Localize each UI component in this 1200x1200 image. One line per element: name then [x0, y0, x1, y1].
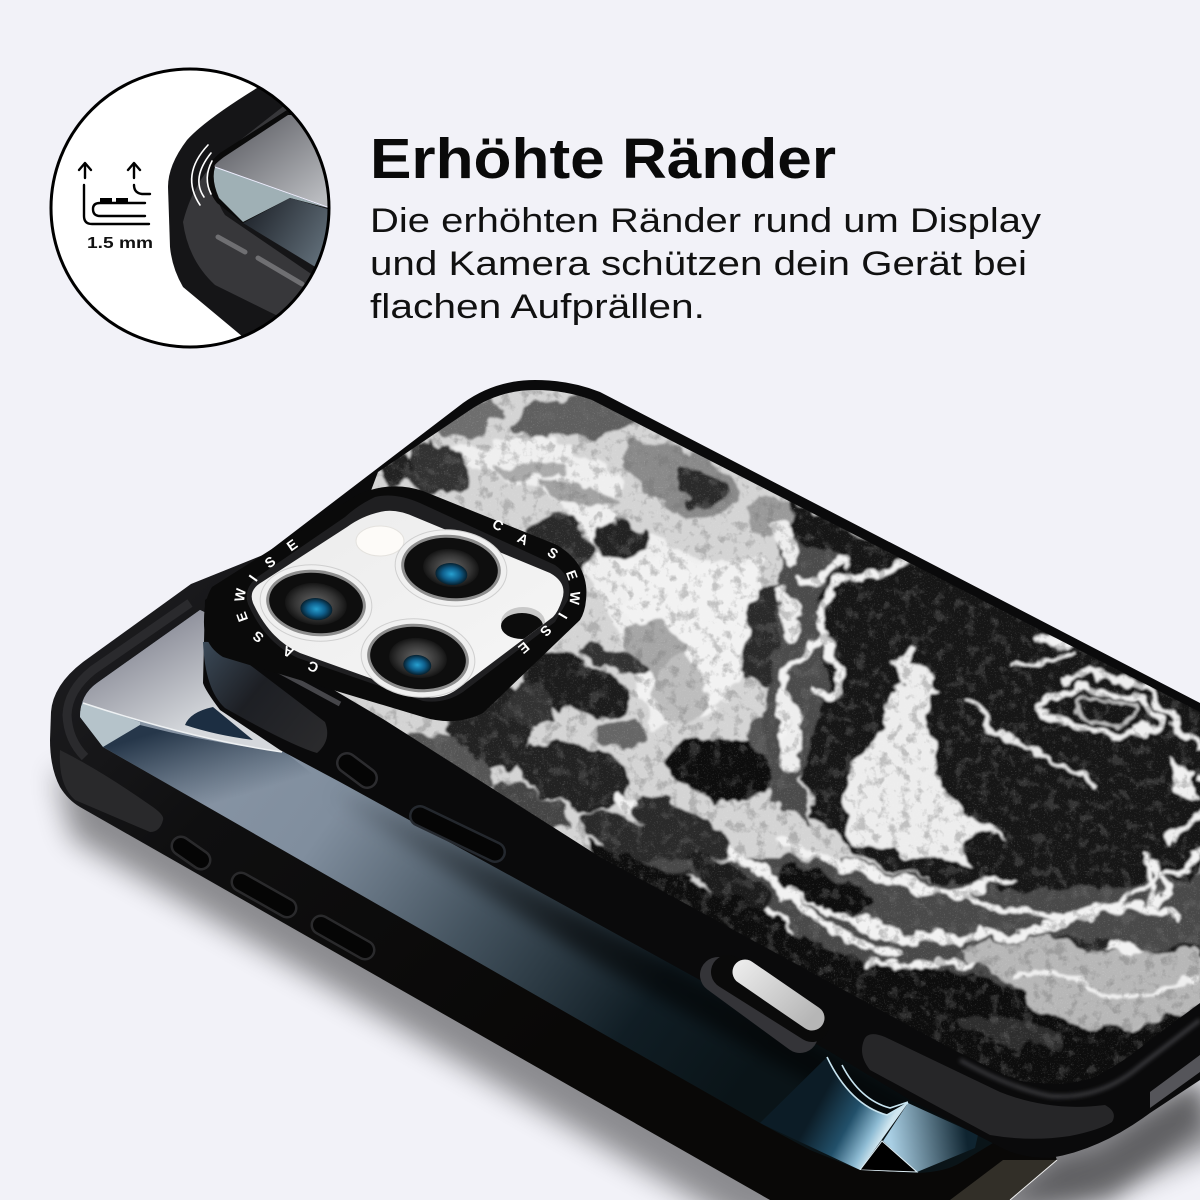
heading: Erhöhte Ränder	[370, 127, 836, 191]
display wallpaper blue arcs	[760, 1057, 978, 1172]
CASEWISE ring lettering: W	[566, 591, 584, 606]
upper phone shadow on display	[352, 799, 938, 1126]
description: flachen Aufprällen.	[370, 288, 705, 326]
CASEWISE ring lettering: S	[537, 622, 555, 640]
upper phone corner bumper pad	[203, 642, 327, 753]
lower phone volume down button	[321, 925, 365, 950]
display wallpaper grey wedge	[82, 610, 284, 752]
close-up translucent band	[183, 106, 311, 315]
side rim teeth	[1150, 1055, 1200, 1108]
lower right bumper pad	[862, 1034, 1114, 1139]
dark blobs	[670, 464, 730, 510]
lower phone action button	[181, 846, 201, 860]
pale bottom marble	[960, 935, 1200, 1030]
camera ring	[204, 486, 586, 721]
flash	[356, 526, 404, 556]
lens bottom	[357, 613, 479, 703]
display	[80, 610, 992, 1173]
lower phone volume up button	[241, 882, 287, 908]
camera rim	[215, 600, 340, 704]
CASEWISE ring lettering: S	[250, 628, 266, 646]
microphone hole	[501, 607, 545, 639]
display wallpaper light blue wedge	[80, 703, 140, 747]
camera opening	[252, 511, 564, 698]
bottom black field	[590, 840, 1200, 1110]
CASEWISE ring lettering: E	[515, 639, 533, 657]
CASEWISE ring lettering: E	[284, 536, 300, 554]
circular callout: raised edge close-up	[51, 69, 340, 350]
CASEWISE ring lettering: W	[231, 586, 249, 603]
close-up phone frame	[168, 88, 314, 336]
lower phone metal edge	[950, 1160, 1057, 1200]
CASEWISE ring lettering: E	[233, 610, 251, 624]
description: Die erhöhten Ränder rund um Display	[370, 202, 1041, 240]
upper phone mute switch	[347, 763, 367, 778]
marble pattern	[334, 390, 1200, 1052]
CASEWISE ring lettering: S	[545, 544, 561, 562]
description: und Kamera schützen dein Gerät bei	[370, 245, 1027, 283]
upper phone side button	[420, 816, 495, 852]
lower phone with display	[50, 500, 1057, 1200]
upper phone charging port	[718, 972, 812, 1035]
callout outline	[51, 69, 329, 347]
CASEWISE ring lettering: S	[262, 553, 278, 571]
marble back panel	[334, 390, 1200, 1084]
description	[370, 202, 1041, 326]
right black field	[790, 500, 1200, 895]
close-up display	[208, 110, 328, 223]
CASEWISE ring lettering: A	[515, 530, 531, 548]
lower phone corner bumper pad	[60, 750, 163, 832]
raised edge icon	[79, 163, 150, 224]
upper phone body	[203, 380, 1200, 1158]
grey halos	[622, 436, 741, 520]
frame highlight	[960, 1020, 1200, 1096]
marble mottling	[353, 390, 1200, 1082]
CASEWISE ring lettering	[231, 516, 584, 676]
lower streaked band	[640, 850, 1200, 1030]
marble speckles	[370, 392, 1200, 1084]
CASEWISE ring lettering: C	[490, 516, 506, 534]
CASEWISE ring lettering: E	[563, 568, 581, 582]
lower right contact shadow	[1010, 1080, 1200, 1200]
CASEWISE ring lettering: C	[306, 658, 320, 676]
display wallpaper navy notch	[185, 707, 253, 740]
impact arcs	[192, 145, 212, 205]
lower phone frame	[50, 500, 1057, 1200]
CASEWISE ring lettering: I	[555, 610, 571, 622]
lower phone frame inner band	[67, 603, 190, 757]
close-up band highlights	[218, 237, 302, 284]
light patches	[430, 440, 770, 730]
1.5 mm label: 1.5 mm	[87, 235, 153, 252]
camera island	[204, 486, 586, 721]
lens left	[256, 559, 376, 647]
white veins	[840, 645, 1030, 868]
lens right	[391, 524, 511, 612]
display wallpaper navy fade	[103, 725, 304, 801]
CASEWISE ring lettering: A	[280, 643, 296, 661]
camera inner wall	[247, 495, 569, 702]
phone drop shadow	[55, 770, 1200, 1200]
CASEWISE ring lettering: I	[245, 572, 261, 584]
